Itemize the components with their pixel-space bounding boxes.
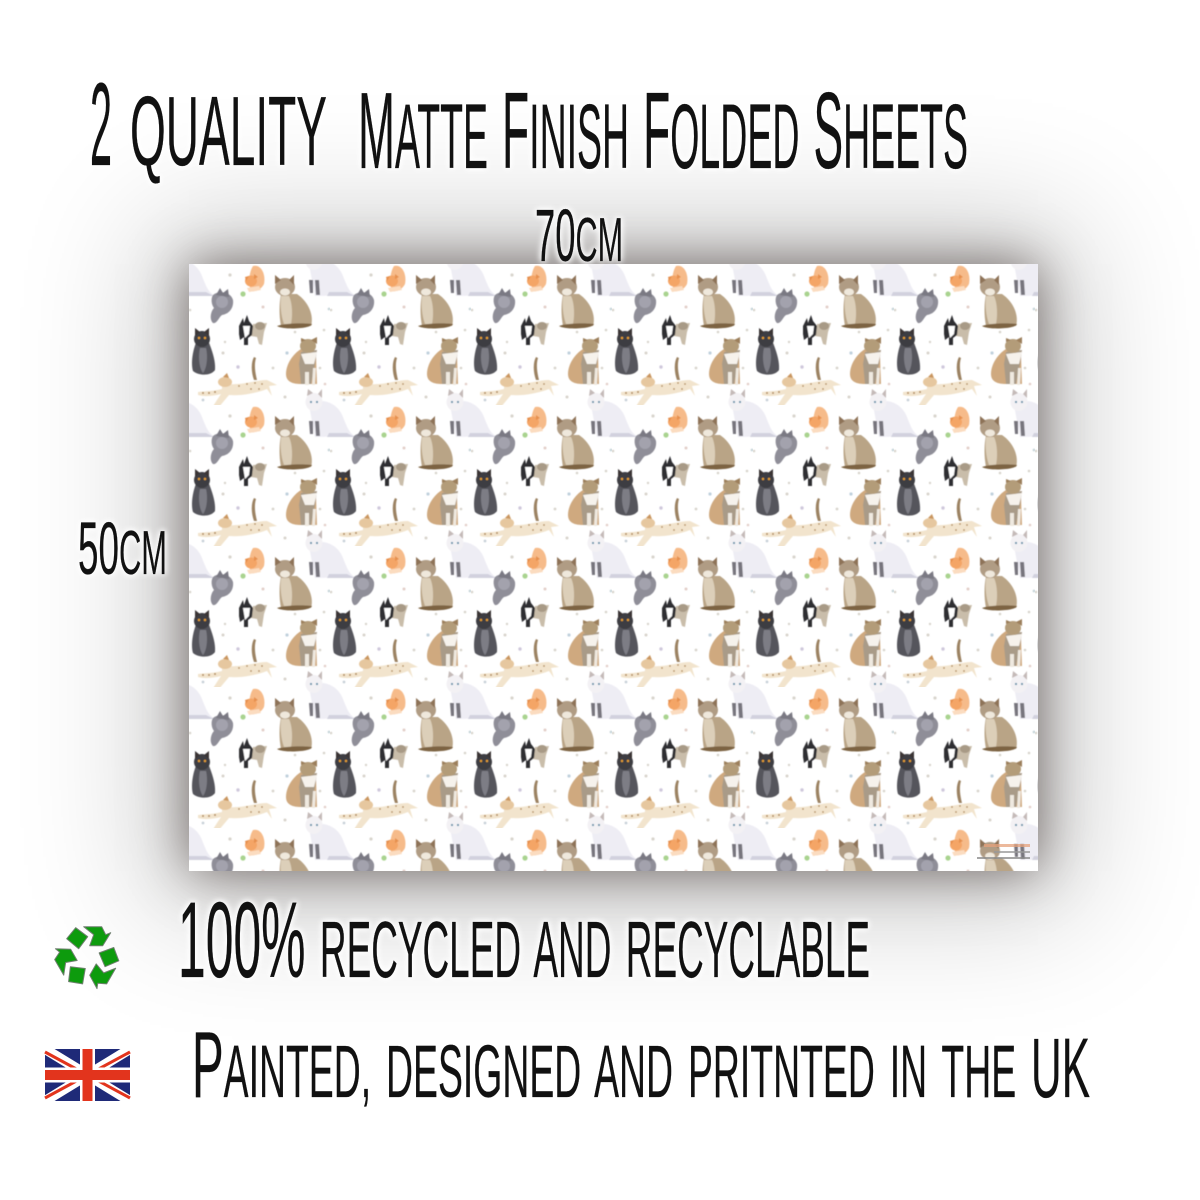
sheet drop shadow	[189, 264, 1038, 871]
wrapping paper sheet	[189, 264, 1038, 871]
title: MATTE FINISH FOLDED SHEETS	[358, 70, 968, 192]
watermark	[977, 844, 1030, 859]
icon: UK flag	[45, 1049, 130, 1101]
title: QUALITY	[130, 76, 327, 186]
title: 2	[90, 59, 112, 191]
icon: recycling symbol	[50, 927, 124, 992]
height label: 50CM	[78, 507, 167, 590]
title	[90, 59, 968, 192]
width label: 70CM	[535, 194, 623, 277]
